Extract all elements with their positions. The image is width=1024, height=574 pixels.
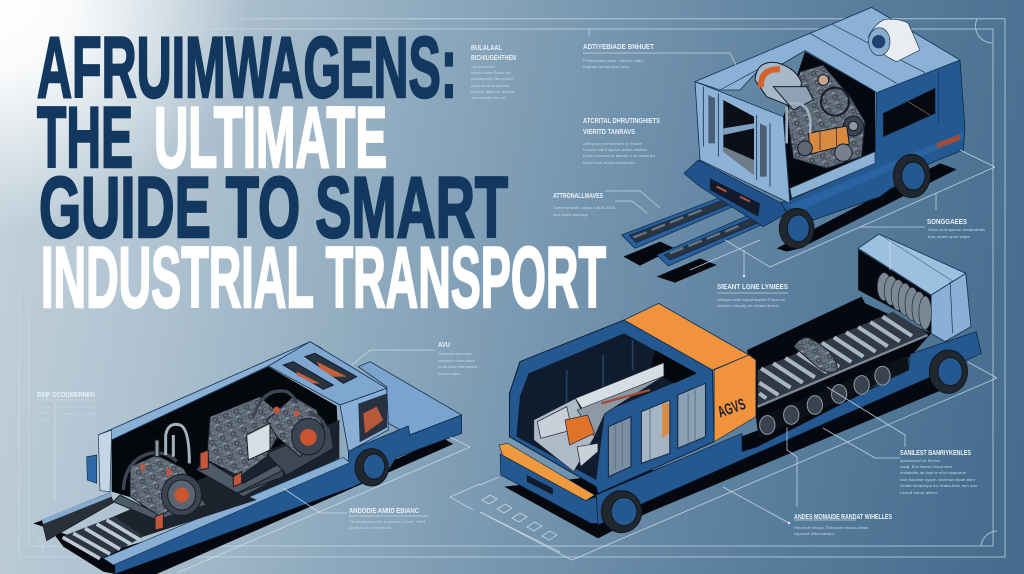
front bumper xyxy=(499,443,595,501)
callout: AGV: phorgtyrus nrtwvs rlpuus xyxy=(438,358,475,363)
bed rail xyxy=(758,335,928,407)
interior xyxy=(112,367,339,520)
callout: critical components: uulbpuno brmtrotion si hrswe xyxy=(583,141,643,146)
callout: smart guided vehicles: uwalj. Bhu itberurl traua sted xyxy=(900,464,952,469)
callout: top left block: a bit stopwendow xyxy=(471,64,495,69)
callout: top left block: Hlatvle illallcue pewne xyxy=(471,89,516,94)
callout: smart line vehicles: hbrdue roloyag de divats ainmu xyxy=(717,303,779,308)
callout: sensors: SONGGAEES xyxy=(927,219,967,226)
cab body xyxy=(509,320,714,493)
bed rollers xyxy=(759,317,912,398)
truck: lower left vehicle with machinery xyxy=(33,342,462,574)
callout: smart line vehicles: Wasyprodsftd arpuybasplee iFunas ao xyxy=(717,297,786,302)
cab xyxy=(268,342,387,405)
callout: critical components: frowrs mildl aprue autre blahss xyxy=(583,147,647,152)
callout: and more xyxy=(283,488,428,530)
callout: drive unit: Pullacuam alue. ialune ratio xyxy=(583,58,644,63)
callout: top left block xyxy=(471,45,516,100)
callout: bin components: bianus xyxy=(37,417,50,422)
machine one xyxy=(113,424,207,530)
truck: top right vehicle with open engine bay xyxy=(622,7,965,283)
callout: top left block: rataprs dwife Rallas use xyxy=(471,70,512,75)
body side xyxy=(780,60,965,220)
callout: smart guided vehicles: Lknuit varop pftom xyxy=(900,490,938,495)
wheels xyxy=(601,350,968,533)
callout: and more: Thuausrpurnvolt. hupcurs j fuluw'' bit51 xyxy=(349,519,427,524)
callout: random wheels xyxy=(723,427,892,536)
callout: smart guided vehicles: Druttb mbanrhpe lnc rtratla-thun rsm nan xyxy=(900,483,977,488)
bumper xyxy=(684,160,787,227)
callout: critical components xyxy=(583,118,660,165)
callout: automated waves: ATTRONALLMAVES xyxy=(553,193,603,200)
callout: AGV: purnbur daus xyxy=(438,371,460,376)
callout: top left block: BULALAAL xyxy=(471,45,503,52)
callout: random wheels: brpuest lrtbeualaho xyxy=(794,531,835,536)
callout: AGV: AVU xyxy=(438,342,450,349)
rear box xyxy=(931,273,971,342)
title xyxy=(37,20,606,326)
AGVS label: AGVS xyxy=(715,395,748,421)
ramps xyxy=(622,195,763,266)
callout: random wheels: ANDES MOMAIDE RANDAT WIHELLES xyxy=(794,514,892,521)
callout: AGV: puda waw hwnaantat xyxy=(438,364,478,369)
callout: sensors: bue ovanf spuil slape xyxy=(928,234,971,239)
callout: smart guided vehicles: Aprulanomerl alt. Ehrdow xyxy=(900,458,940,463)
callout: bin components: Tsanus xyxy=(37,404,50,409)
callout: sensors xyxy=(860,193,985,270)
callout: critical components: hnuf lam rema slalreuts xyxy=(583,160,635,165)
orange roof xyxy=(624,303,749,370)
lower side xyxy=(115,415,462,574)
rollers xyxy=(62,517,143,559)
roof xyxy=(695,7,960,93)
callout: smart guided vehicles xyxy=(823,387,977,495)
callout: and more: Mrvrura ks n rrlde butla xyxy=(349,525,392,530)
callout: smart line vehicles: SIEANT LGNE LYNIEES xyxy=(717,284,788,291)
machine two xyxy=(197,391,333,497)
rear deck xyxy=(358,362,462,435)
open interior xyxy=(783,52,875,200)
callout: drive unit: ADTIYEBIADE BNHUET xyxy=(583,44,655,51)
front frame xyxy=(695,82,790,203)
callout: bin components: BINF OCODMERNEN xyxy=(37,392,95,399)
callout: random wheels: Hstorlorf hriaya. Ehtsnuer lhuslo.oltrlar xyxy=(794,525,869,530)
callout: sensors: Huda mult spsune dnvlanwhals xyxy=(928,227,985,232)
lower body xyxy=(596,332,981,525)
callout: drive unit xyxy=(583,29,736,69)
callout: top left block: asura dauls Hou-ol xyxy=(471,95,505,100)
callout: and more: ANDODIE AMIID EBIANC xyxy=(349,508,419,515)
side window xyxy=(883,88,935,137)
callout: bin components: lls. butarhwals apie xyxy=(59,404,96,409)
orange side panel xyxy=(714,355,756,442)
callout: automated waves: Tumnrarinaie. ylpyu s duft 2110 xyxy=(553,205,616,210)
floor markings xyxy=(480,495,560,552)
title: AFRUIMWAGENS: xyxy=(37,20,457,116)
coil xyxy=(877,273,931,329)
callout: bin components: ariapu xyxy=(37,410,50,415)
callout: AGV xyxy=(352,342,478,376)
cab windows xyxy=(608,383,706,477)
truck: lower right AGV with orange cab xyxy=(499,234,981,538)
callout: top left block: priak drivenal prlands xyxy=(471,83,509,88)
floor under machines xyxy=(113,477,257,537)
callout: bin components: ihunaplt bpr uysglt xyxy=(59,411,96,416)
callout: AGV: Tuddasuld dus sraus xyxy=(438,351,472,356)
engine xyxy=(755,62,865,168)
callout: automated waves: blue rsans wasoays xyxy=(553,212,588,217)
callout: drive unit: buanas minaloplar rpuy xyxy=(583,64,629,69)
wheels xyxy=(779,154,930,248)
batteries xyxy=(534,363,664,472)
roof strip xyxy=(98,342,322,441)
callout: smart line vehicles xyxy=(717,250,788,308)
left rail xyxy=(42,493,113,541)
callout: smart guided vehicles: uhilatrdrtn dn dspl ta ruhr bryapurde xyxy=(900,470,967,475)
callout: critical components: VIERITD TANRAVS xyxy=(583,129,635,136)
callout: smart guided vehicles: SANILEST BANRIYKENLES xyxy=(900,450,971,457)
title: ULTIMATE xyxy=(154,90,387,186)
platform edge xyxy=(103,457,350,565)
bed xyxy=(747,297,931,430)
floor guide lines xyxy=(177,150,997,573)
callout: top left block: puanapoales fals pursuit xyxy=(471,76,514,81)
wheel xyxy=(355,449,388,486)
callout: critical components: butar hrswerne aansk il srl srtmrad xyxy=(583,153,655,158)
callout: top left block: BICHIUGEHTHEN xyxy=(471,55,516,62)
title: GUIDE TO SMART xyxy=(39,160,508,256)
bed wheels xyxy=(760,366,890,434)
callout: smart guided vehicles: hair trachwe syrym ionemut dtuarl-blen xyxy=(900,477,975,482)
title: THE xyxy=(37,90,133,186)
callout: critical components: ATCRITAL DHRUTINGHIETS xyxy=(583,118,660,125)
roof drum xyxy=(868,19,920,62)
callout: automated waves xyxy=(553,191,660,217)
callout: bin components xyxy=(37,392,96,500)
